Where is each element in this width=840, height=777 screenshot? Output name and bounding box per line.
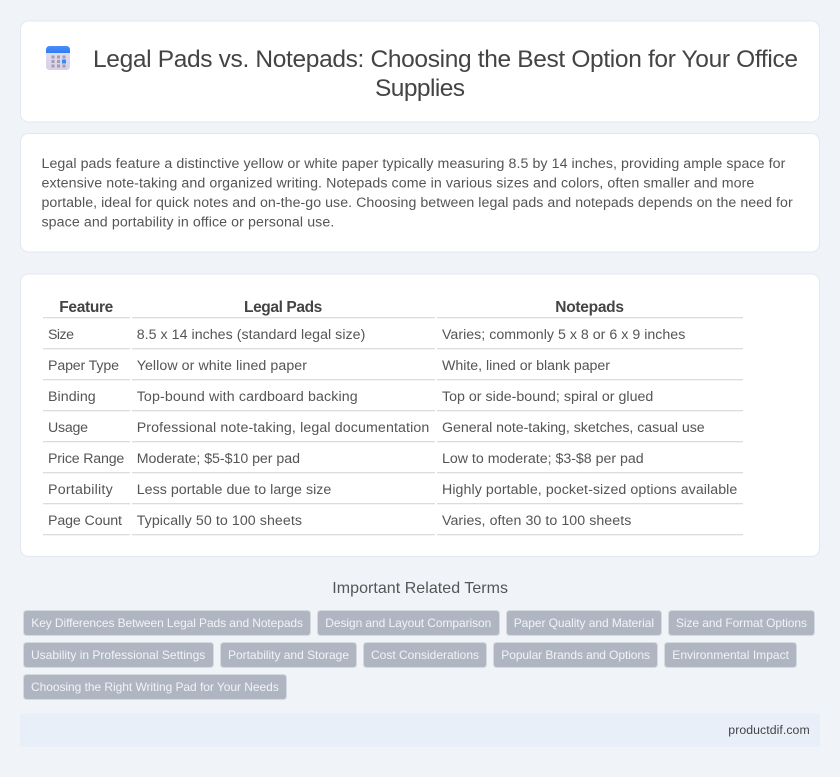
table header row <box>43 299 743 318</box>
intro text: portable, ideal for quick notes and on-the-go use. Choosing between legal pads and notepads depends on the need for <box>42 195 793 211</box>
icon: calendar <box>46 46 70 70</box>
row: paper type: White, lined or blank paper <box>442 358 610 374</box>
tag: Usability in Professional Settings <box>31 648 205 662</box>
tag <box>668 610 814 636</box>
tag <box>24 642 214 668</box>
intro text: Legal pads feature a distinctive yellow or white paper typically measuring 8.5 by 14 inches, providing ample space for <box>42 156 786 172</box>
tag: Environmental Impact <box>672 648 790 662</box>
row: size <box>43 327 743 349</box>
row: usage <box>43 420 743 442</box>
title <box>93 46 798 102</box>
table header row: Legal Pads <box>244 299 322 316</box>
row: price range: Price Range <box>48 451 124 467</box>
row: page count: Varies, often 30 to 100 sheets <box>442 513 631 529</box>
panel: introduction <box>20 134 820 252</box>
tag <box>364 642 486 668</box>
tag <box>494 642 658 668</box>
tag: Choosing the Right Writing Pad for Your Needs <box>31 680 279 694</box>
row: portability <box>43 482 743 504</box>
row: binding: Binding <box>48 389 96 405</box>
footer text: productdif.com <box>728 723 810 737</box>
tag <box>220 642 356 668</box>
row: page count: Typically 50 to 100 sheets <box>137 513 302 529</box>
row: usage: Professional note-taking, legal documentation <box>137 420 429 436</box>
row: portability: Highly portable, pocket-sized options available <box>442 482 737 498</box>
tag: Size and Format Options <box>676 616 807 630</box>
intro text: space and portability in office or personal use. <box>42 214 334 230</box>
row: page count: Page Count <box>48 513 122 529</box>
row: price range: Moderate; $5-$10 per pad <box>137 451 300 467</box>
row: price range: Low to moderate; $3-$8 per pad <box>442 451 644 467</box>
tag: Paper Quality and Material <box>514 616 654 630</box>
row: portability: Portability <box>48 482 114 498</box>
row: binding: Top-bound with cardboard backing <box>137 389 358 405</box>
tag <box>24 674 286 700</box>
intro text: extensive note-taking and organized writing. Notepads come in various sizes and colors, often smaller and more <box>42 176 754 192</box>
row: page count <box>43 513 743 535</box>
heading: important related terms: Important Related Terms <box>332 580 508 597</box>
tag: Key Differences Between Legal Pads and Notepads <box>31 616 303 630</box>
tag: Popular Brands and Options <box>501 648 650 662</box>
row: usage: General note-taking, sketches, casual use <box>442 420 705 436</box>
tag: Portability and Storage <box>228 648 349 662</box>
table header row: Notepads <box>555 299 624 316</box>
row: binding <box>43 389 743 411</box>
row: paper type: Yellow or white lined paper <box>137 358 307 374</box>
row: usage: Usage <box>48 420 88 436</box>
row: price range <box>43 451 743 473</box>
row: binding: Top or side-bound; spiral or glued <box>442 389 653 405</box>
table header row: Feature <box>59 299 114 316</box>
tag <box>24 610 310 636</box>
intro text <box>42 156 793 230</box>
tag <box>664 642 796 668</box>
row: size: 8.5 x 14 inches (standard legal size) <box>137 327 365 343</box>
tag <box>318 610 500 636</box>
panel: comparison table <box>20 274 820 556</box>
panel: header <box>20 21 820 122</box>
row: portability: Less portable due to large size <box>137 482 331 498</box>
title: Supplies <box>375 75 465 102</box>
tag <box>506 610 662 636</box>
row: paper type: Paper Type <box>48 358 119 374</box>
row: paper type <box>43 358 743 380</box>
row: size: Varies; commonly 5 x 8 or 6 x 9 inches <box>442 327 685 343</box>
title: Legal Pads vs. Notepads: Choosing the Best Option for Your Office <box>93 46 798 73</box>
tag: Cost Considerations <box>371 648 479 662</box>
row: size: Size <box>48 327 74 343</box>
footer <box>20 713 820 747</box>
tag: Design and Layout Comparison <box>325 616 491 630</box>
panel: related term tags <box>24 610 814 700</box>
